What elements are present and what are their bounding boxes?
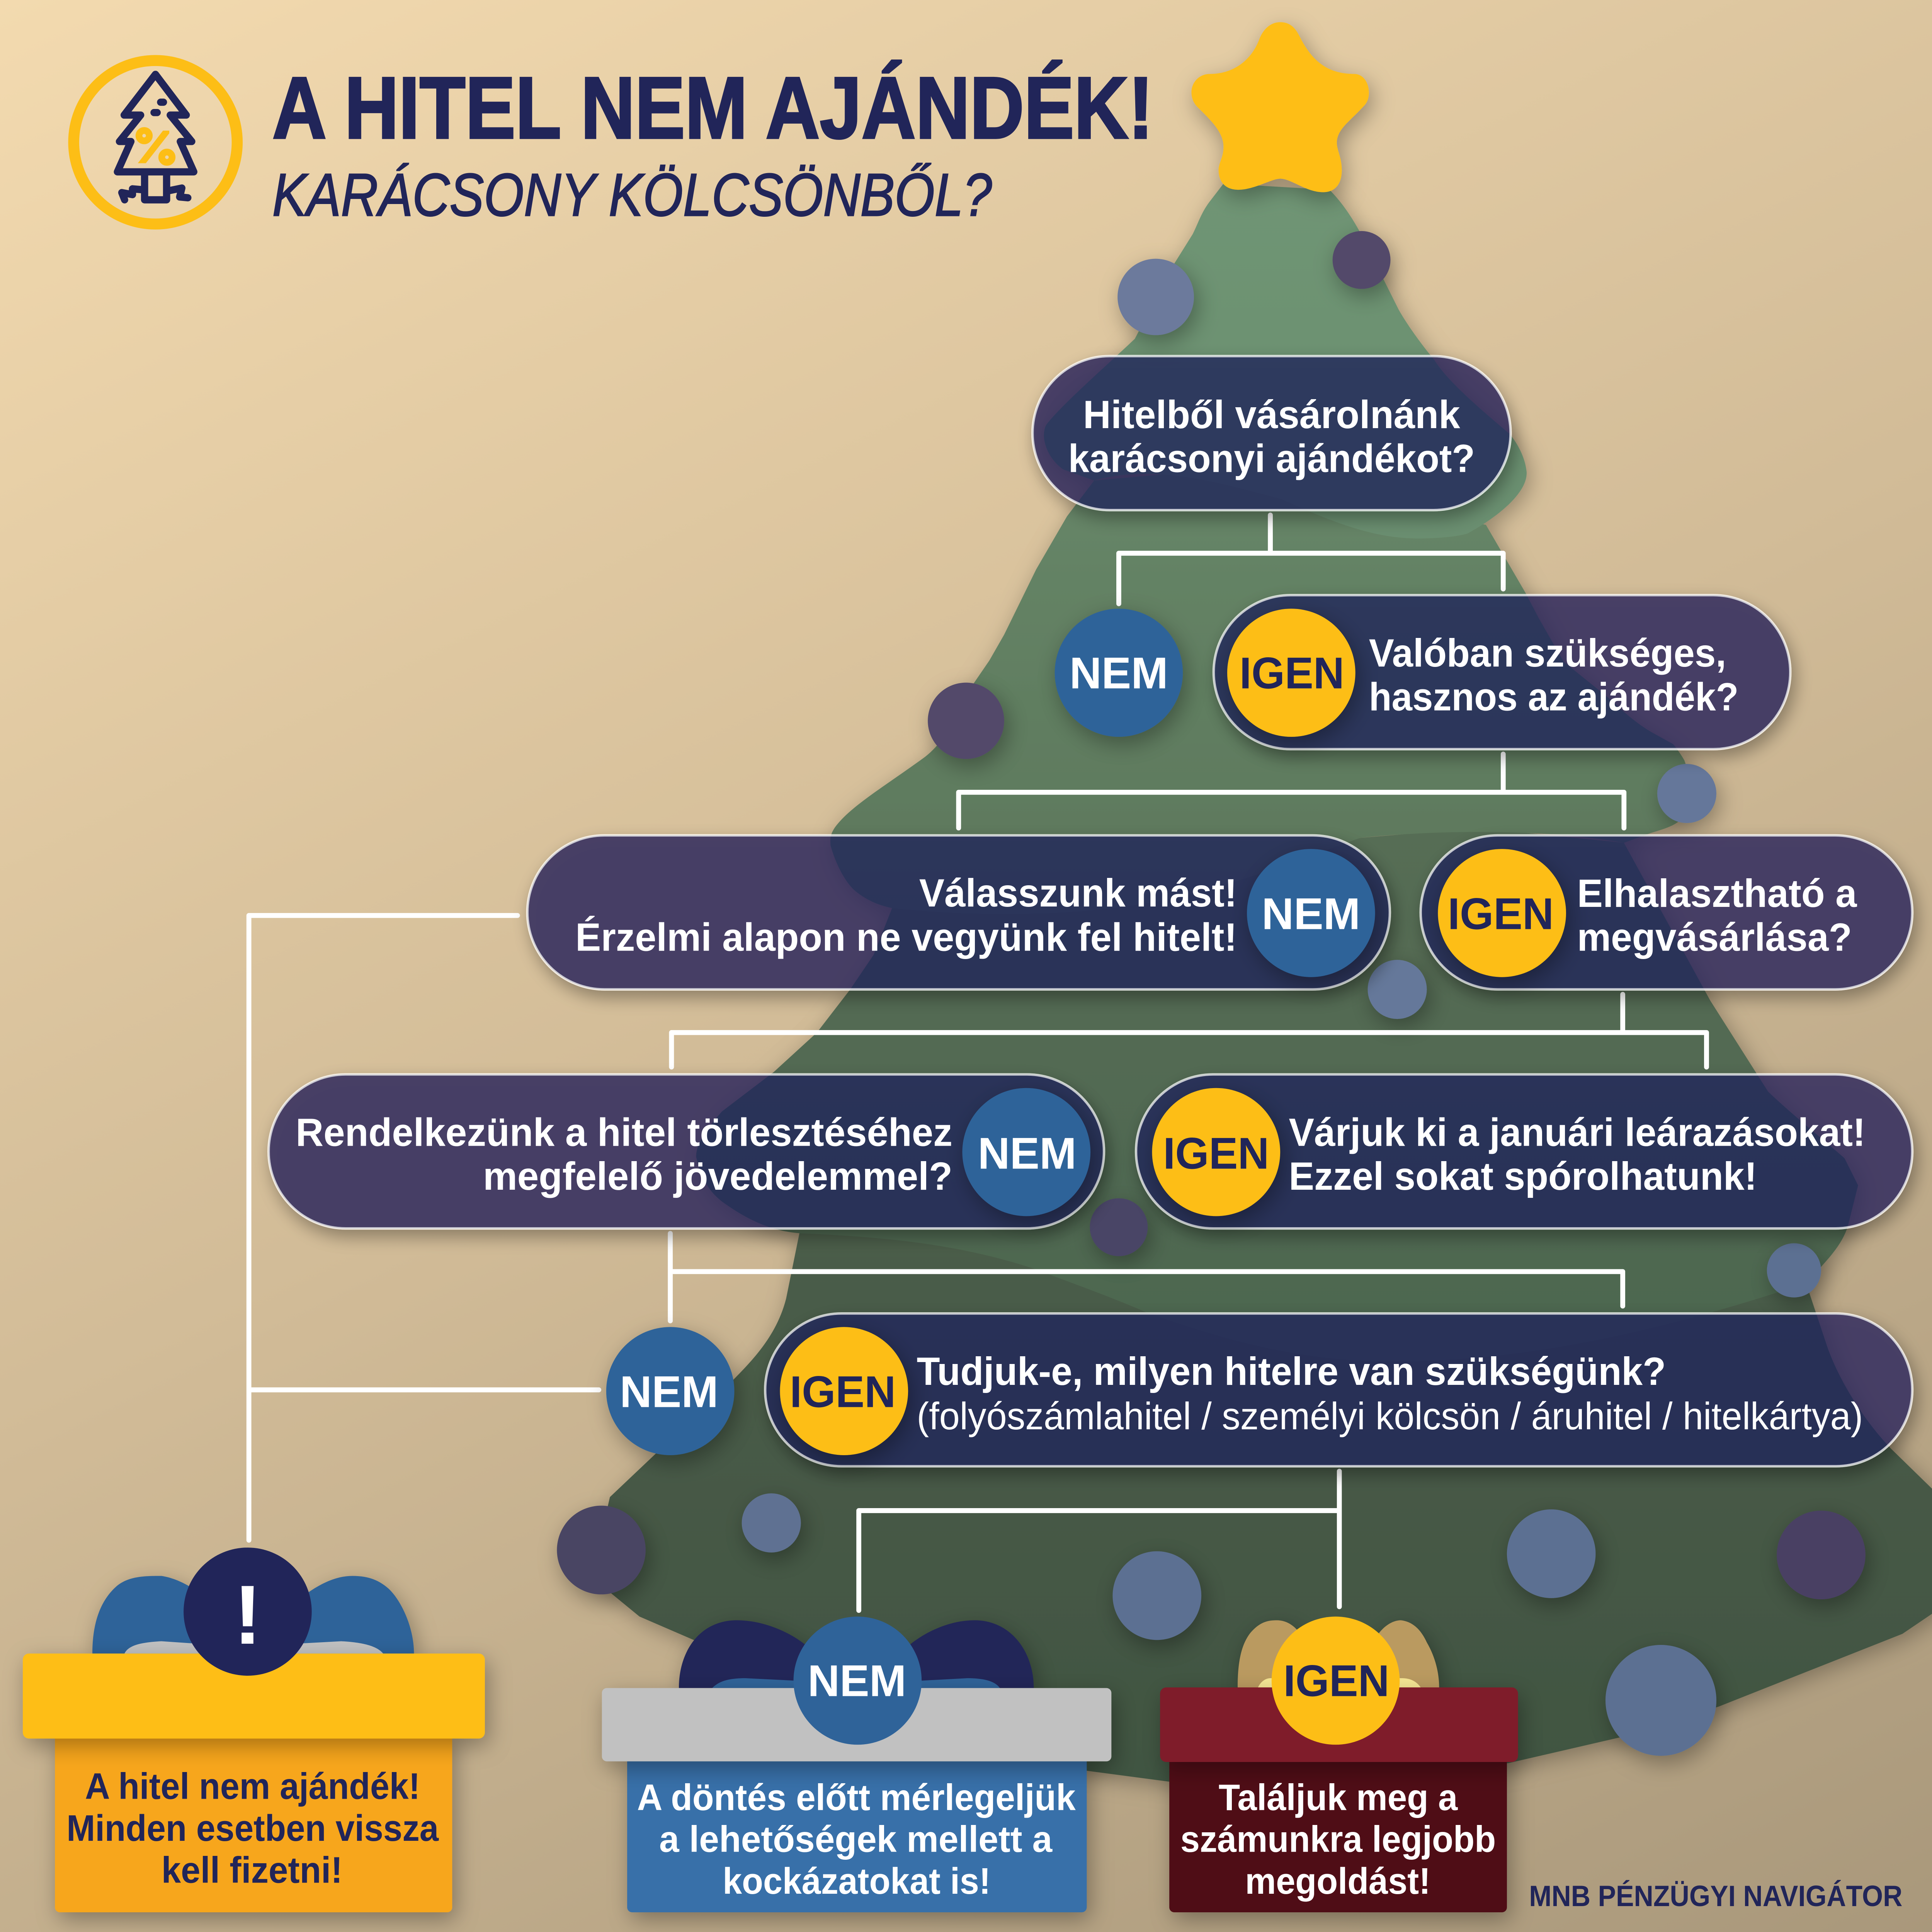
ornament [1368, 960, 1427, 1019]
question: hitelből: karácsonyi ajándékot? [1068, 436, 1475, 480]
gift: grey and blue, nem: NEM [808, 1656, 906, 1706]
answer: igen, tudjuk-e: Tudjuk-e, milyen hitelre van szükségünk? [917, 1349, 1666, 1393]
question: hitelből: Hitelből vásárolnánk [1083, 393, 1460, 437]
ornament [742, 1493, 801, 1553]
answer: igen, valóban szükséges [1214, 595, 1790, 749]
ornament [1605, 1645, 1716, 1756]
ornament [1112, 1551, 1201, 1640]
footer credit: MNB PÉNZÜGYI NAVIGÁTOR [1529, 1880, 1902, 1913]
gift: red, igen: IGEN [1283, 1656, 1389, 1706]
title: A HITEL NEM AJÁNDÉK! [272, 59, 1153, 156]
answer: igen, várjuk ki [1136, 1075, 1912, 1228]
answer: igen, elhalasztható [1421, 835, 1912, 990]
answer: nem, rendelkezünk: megfelelő jövedelemmel? [483, 1154, 952, 1198]
gift: grey and blue, nem: a lehetőségek mellett a [659, 1819, 1053, 1860]
gift: grey and blue, nem: kockázatokat is! [723, 1861, 991, 1902]
ornament [557, 1506, 646, 1594]
gift: red, igen: számunkra legjobb [1180, 1819, 1496, 1860]
answer: nem: NEM [1070, 649, 1168, 698]
answer: nem: NEM [620, 1367, 718, 1417]
gift: red, igen: Találjuk meg a [1219, 1777, 1458, 1818]
answer: nem, rendelkezünk: Rendelkezünk a hitel törlesztéséhez [296, 1111, 952, 1155]
question: hitelből [1032, 356, 1510, 510]
answer: nem, rendelkezünk [269, 1075, 1104, 1228]
gift: grey and blue, nem [602, 1617, 1111, 1912]
answer: nem, válasszunk mást: Válasszunk mást! [919, 871, 1237, 915]
logo icon: tree with percent [74, 61, 237, 224]
answer: igen, elhalasztható: Elhalasztható a [1577, 871, 1857, 915]
christmas tree [592, 184, 1932, 1782]
ornament [1767, 1243, 1821, 1298]
gift: yellow, warning: ! [234, 1568, 262, 1662]
answer: igen, elhalasztható: IGEN [1448, 889, 1554, 939]
answer: igen, valóban szükséges: hasznos az ajándék? [1369, 675, 1738, 719]
answer: nem, rendelkezünk: NEM [978, 1129, 1077, 1179]
gift: red, igen: megoldást! [1245, 1861, 1430, 1902]
star [1192, 22, 1369, 192]
ornament [1117, 259, 1194, 335]
gift: yellow, warning: Minden esetben vissza [66, 1808, 439, 1849]
connector lines [249, 515, 1706, 1611]
answer: igen, tudjuk-e: IGEN [790, 1367, 896, 1417]
answer: igen, tudjuk-e [765, 1313, 1912, 1466]
gift: yellow, warning [23, 1548, 485, 1912]
ornament [928, 683, 1004, 759]
answer: nem, válasszunk mást: Érzelmi alapon ne vegyünk fel hitelt! [575, 915, 1237, 959]
answer: nem [1055, 609, 1183, 737]
answer: igen, várjuk ki: IGEN [1163, 1129, 1269, 1179]
ornament [1657, 764, 1716, 823]
answer: nem, válasszunk mást: NEM [1262, 889, 1360, 939]
gift: yellow, warning: kell fizetni! [162, 1849, 342, 1891]
ornament [1090, 1198, 1148, 1256]
ornament [1333, 231, 1391, 289]
answer: igen, tudjuk-e: (folyószámlahitel / személyi kölcsön / áruhitel / hitelkártya) [917, 1395, 1863, 1437]
ornament [1507, 1509, 1595, 1598]
answer: nem [606, 1327, 735, 1455]
answer: igen, elhalasztható: megvásárlása? [1577, 915, 1852, 959]
answer: igen, várjuk ki: Ezzel sokat spórolhatunk! [1289, 1154, 1757, 1198]
answer: igen, várjuk ki: Várjuk ki a januári leárazásokat! [1289, 1111, 1866, 1155]
answer: nem, válasszunk mást [527, 835, 1390, 990]
answer: igen, valóban szükséges: Valóban szükséges, [1369, 631, 1726, 675]
gift: grey and blue, nem: A döntés előtt mérlegeljük [637, 1777, 1076, 1818]
ornament [1777, 1510, 1866, 1599]
gift: red, igen [1160, 1617, 1518, 1912]
subtitle: KARÁCSONY KÖLCSÖNBŐL? [272, 162, 992, 229]
answer: igen, valóban szükséges: IGEN [1240, 649, 1344, 698]
gift: yellow, warning: A hitel nem ajándék! [85, 1766, 420, 1807]
